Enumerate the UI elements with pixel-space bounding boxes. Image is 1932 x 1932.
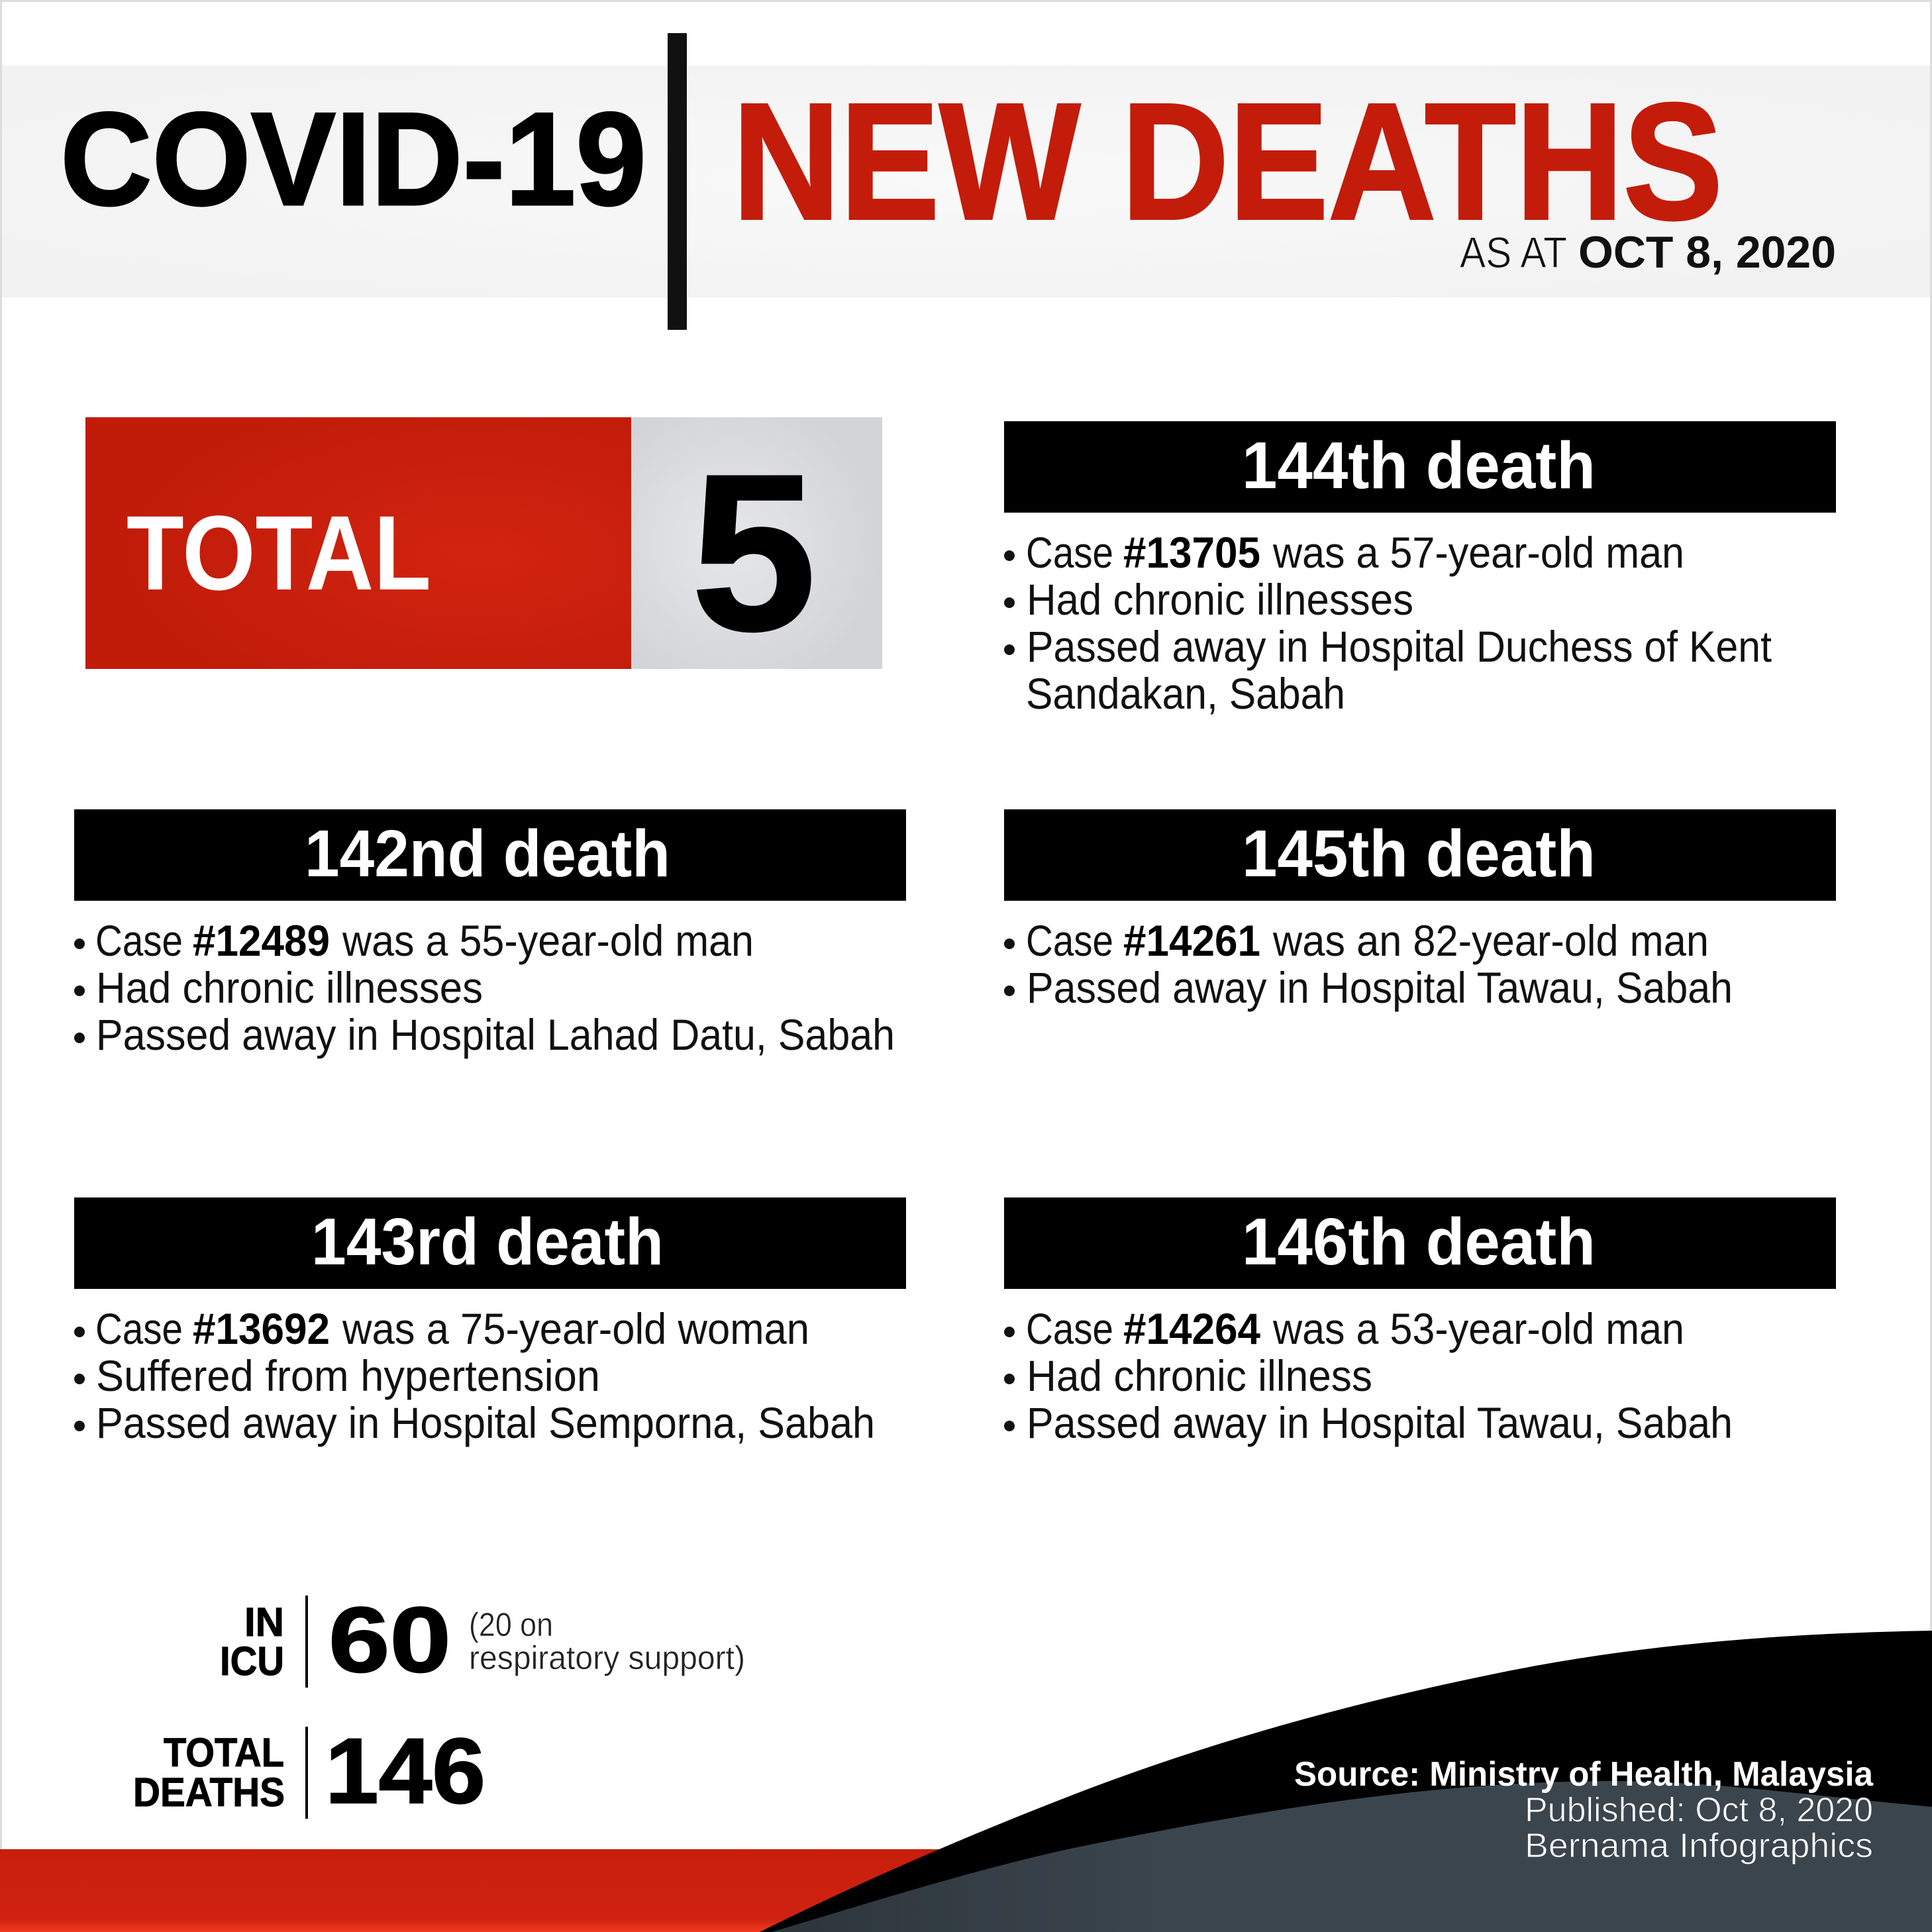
heading: 144th death (1242, 429, 1596, 503)
date line (1460, 227, 1836, 278)
label: IN ICU: ICU (220, 1639, 284, 1684)
source credits: Bernama Infographics (1525, 1827, 1873, 1865)
heading bar (74, 1197, 906, 1289)
details list: Had chronic illnesses (1027, 575, 1413, 624)
details list: Had chronic illnesses (96, 963, 483, 1012)
details list: Case (95, 916, 183, 965)
panel: 145th death (1004, 809, 1836, 1012)
header band (2, 66, 1930, 297)
label: TOTAL DEATHS (133, 1730, 285, 1815)
details list: #13692 (193, 1304, 330, 1353)
date line: OCT 8, 2020 (1578, 227, 1836, 278)
details list: Passed away in Hospital Duchess of Kent (1027, 622, 1772, 671)
label: IN ICU: IN (244, 1600, 284, 1645)
details list: was a 53-year-old man (1272, 1304, 1684, 1353)
heading: 143rd death (311, 1205, 664, 1279)
title: COVID-19: COVID-19 (60, 85, 646, 233)
details list (74, 916, 895, 1059)
date line: AS AT (1460, 228, 1567, 277)
note: respiratory support (469, 1606, 745, 1676)
details list (1004, 916, 1733, 1012)
details list: was a 57-year-old man (1272, 528, 1684, 577)
note: respiratory support: (20 on (469, 1606, 553, 1643)
details list: Passed away in Hospital Semporna, Sabah (96, 1398, 875, 1447)
note: respiratory support: respiratory support) (469, 1639, 745, 1676)
panel: 144th death (1004, 421, 1836, 718)
red total block (85, 417, 631, 669)
heading: 142nd death (305, 817, 670, 891)
details list: was an 82-year-old man (1272, 916, 1709, 965)
details list: Passed away in Hospital Tawau, Sabah (1027, 1398, 1733, 1447)
details list: #14261 (1123, 916, 1260, 965)
stat divider (305, 1596, 308, 1688)
grey number block (631, 417, 882, 669)
label: TOTAL DEATHS: DEATHS (133, 1770, 285, 1815)
details list: Passed away in Hospital Tawau, Sabah (1027, 963, 1733, 1012)
stat: total deaths (133, 1719, 485, 1823)
footer: black swoosh (760, 1631, 1932, 1932)
panel: 142nd death (74, 809, 906, 1059)
details list: Case (1026, 1304, 1113, 1353)
heading bar (74, 809, 906, 901)
details list: Case (1026, 528, 1113, 577)
details list: Passed away in Hospital Lahad Datu, Sabah (96, 1010, 895, 1059)
footer: slate swoosh (772, 1781, 1932, 1932)
stat: in ICU (220, 1588, 745, 1692)
label: TOTAL: TOTAL (127, 493, 431, 612)
details list: #13705 (1123, 528, 1260, 577)
number: 60: 60 (329, 1588, 451, 1692)
label: IN ICU (220, 1600, 284, 1684)
heading: 146th death (1242, 1205, 1596, 1279)
heading bar (1004, 809, 1836, 901)
heading bar (1004, 421, 1836, 513)
source credits: Source: Ministry of Health, Malaysia (1294, 1755, 1874, 1794)
details list: was a 55-year-old man (342, 916, 754, 965)
details list: Case (95, 1304, 183, 1353)
panel: 143rd death (74, 1197, 906, 1447)
panel: total count (85, 417, 882, 676)
details list: Case (1026, 916, 1113, 965)
label: TOTAL DEATHS: TOTAL (164, 1730, 284, 1775)
details list: Sandakan, Sabah (1026, 669, 1345, 718)
title divider bar (668, 33, 687, 330)
number: 146: 146 (325, 1719, 485, 1823)
details list: Suffered from hypertension (96, 1351, 600, 1400)
details list: Had chronic illness (1027, 1351, 1372, 1400)
source credits: Published: Oct 8, 2020 (1525, 1791, 1873, 1829)
heading: 145th death (1242, 817, 1596, 891)
details list (1004, 528, 1772, 718)
details list (74, 1304, 875, 1447)
details list: #14264 (1123, 1304, 1260, 1353)
number: 5: 5 (691, 429, 816, 676)
panel: 146th death (1004, 1197, 1836, 1447)
details list: was a 75-year-old woman (342, 1304, 809, 1353)
footer: red band (0, 1849, 993, 1932)
source credits (1294, 1755, 1874, 1865)
heading bar (1004, 1197, 1836, 1289)
stat divider (305, 1727, 308, 1819)
details list: #12489 (193, 916, 330, 965)
details list (1004, 1304, 1733, 1447)
title: NEW DEATHS: NEW DEATHS (733, 69, 1723, 254)
